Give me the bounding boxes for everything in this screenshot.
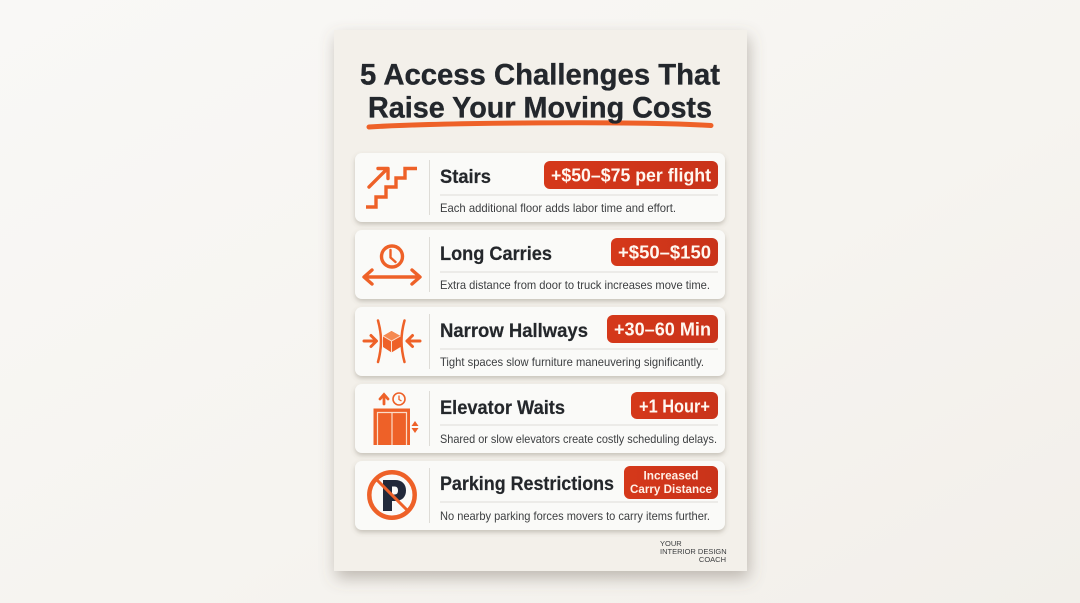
panel: elevator waits [355, 384, 725, 453]
panel: stairs [355, 153, 725, 222]
icon: stairs [366, 168, 417, 207]
description: long carries: Extra distance from door to truck increases move time. [440, 278, 710, 292]
title [360, 58, 720, 124]
badge: carry distance [624, 466, 718, 499]
badge: long carries cost [611, 238, 718, 266]
badge: long carries cost: +$50–$150 [618, 242, 711, 262]
description: narrow hallways: Tight spaces slow furniture maneuvering significantly. [440, 355, 704, 369]
heading: elevator waits: Elevator Waits [440, 397, 565, 419]
icon: elevator [374, 393, 418, 445]
icon: clock and double arrow [364, 246, 420, 284]
heading: parking restrictions: Parking Restrictions [440, 473, 614, 495]
footer logo text: YOUR [660, 539, 682, 548]
heading: long carries: Long Carries [440, 243, 552, 265]
panel: poster [334, 30, 747, 571]
badge: narrow hallways time [607, 315, 718, 343]
panel: narrow hallways [355, 307, 725, 376]
description: parking restrictions: No nearby parking forces movers to carry items further. [440, 509, 710, 523]
title underline [369, 123, 711, 127]
icon: no parking [369, 472, 415, 518]
heading: stairs: Stairs [440, 166, 491, 188]
description: elevator waits: Shared or slow elevators create costly scheduling delays. [440, 432, 717, 446]
footer logo text [660, 539, 727, 564]
badge: elevator time: +1 Hour+ [639, 396, 710, 416]
badge: elevator time [631, 392, 718, 419]
footer logo text: COACH [699, 555, 726, 564]
panel: long carries [355, 230, 725, 299]
footer logo text: INTERIOR DESIGN [660, 547, 727, 556]
badge: narrow hallways time: +30–60 Min [614, 318, 711, 340]
icon: box between walls [364, 320, 420, 362]
heading: narrow hallways: Narrow Hallways [440, 320, 588, 342]
panel: parking restrictions [355, 461, 725, 530]
badge: carry distance: Increased [644, 468, 698, 482]
title: 5 Access Challenges That [360, 58, 720, 92]
badge: stairs cost: +$50–$75 per flight [551, 164, 711, 186]
description: stairs: Each additional floor adds labor time and effort. [440, 201, 676, 215]
badge: carry distance: Carry Distance [630, 482, 712, 496]
title: Raise Your Moving Costs [368, 92, 712, 124]
